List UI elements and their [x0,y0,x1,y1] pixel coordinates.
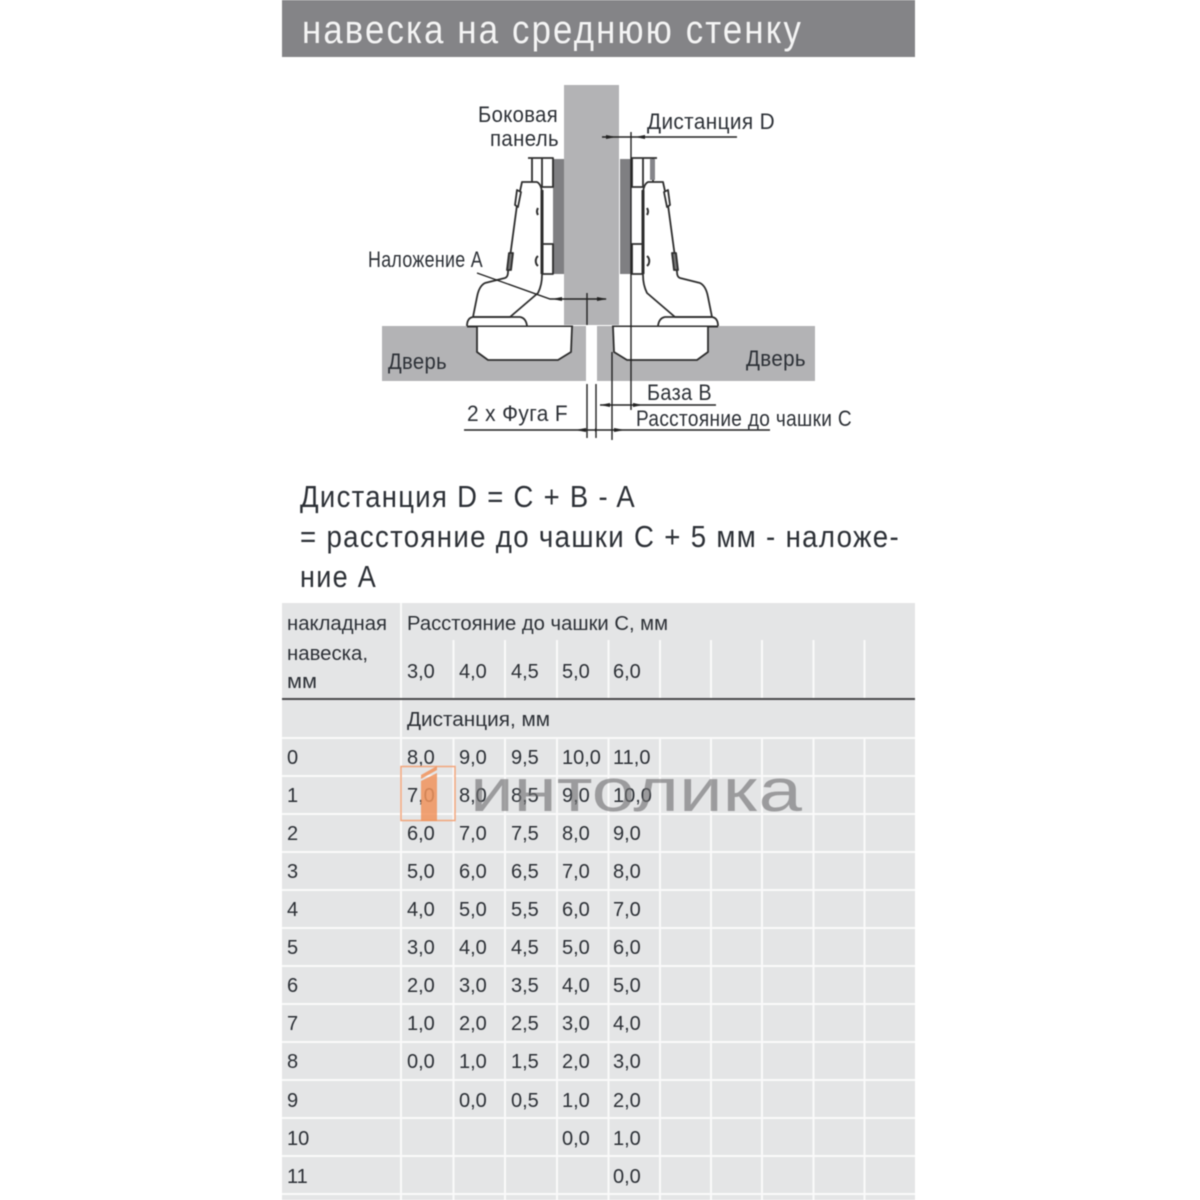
label: 2 x joint F: 2 x Фуга F [467,401,568,426]
table rows: 3,0 [407,937,435,959]
table rows: 6,0 [613,937,641,959]
label: side panel [478,102,559,151]
left mounting pad [553,159,564,274]
table rows: 1,0 [407,1013,435,1035]
table rows: 3,0 [613,1051,641,1073]
table rows: 0,5 [511,1090,539,1112]
dimension arrows [552,135,645,432]
table header: накладная [287,613,387,635]
right hinge accent [650,159,655,180]
table rows: 0,0 [562,1128,590,1150]
table rows: 8,0 [562,823,590,845]
table rows: 2 [287,823,298,845]
table header: мм [287,671,317,693]
table header: 5,0 [562,661,590,683]
right mounting pad [620,159,631,274]
table rows: 6,0 [562,899,590,921]
table rows [287,747,652,1188]
table rows: 4,0 [613,1013,641,1035]
right hinge [612,158,718,360]
table rows: 2,5 [511,1013,539,1035]
table rows: 9,0 [459,747,487,769]
table header: 3,0 [407,661,435,683]
table header: Расстояние до чашки С, мм [407,613,668,635]
table rows: 9 [287,1090,298,1112]
table rows: 8,0 [613,861,641,883]
table rows: 3 [287,861,298,883]
table rows: 5,0 [613,975,641,997]
header rule [282,698,915,700]
table rows: 9,5 [511,747,539,769]
table rows: 1,0 [613,1128,641,1150]
table rows: 4,0 [562,975,590,997]
table rows: 6,0 [459,861,487,883]
left door [382,326,586,381]
table rows: 0 [287,747,298,769]
table rows: 8,0 [407,747,435,769]
table rows: 11,0 [613,747,650,769]
table header: 4,0 [459,661,487,683]
side panel [564,85,619,325]
table rows: 2,0 [407,975,435,997]
table rows: 3,5 [511,975,539,997]
table rows: 7,0 [407,785,435,807]
table header: навеска, [287,643,368,665]
table rows: 4,5 [511,937,539,959]
table rows: 6 [287,975,298,997]
table rows: 6,5 [511,861,539,883]
table rows: 8,0 [459,785,487,807]
label: right door: Дверь [746,346,806,371]
table rows: 5 [287,937,298,959]
table rows: 1,0 [562,1090,590,1112]
table rows: 2,0 [562,1051,590,1073]
dimension lines [464,132,770,440]
formula text: = расстояние до чашки С + 5 мм - наложе- [300,519,900,554]
label: base B: База B [647,380,712,405]
table rows: 5,0 [407,861,435,883]
table header: 4,5 [511,661,539,683]
watermark logo [401,757,803,824]
distance table [282,603,915,1200]
table rows: 0,0 [613,1166,641,1188]
table background [282,603,915,1200]
logo icon [401,766,455,821]
table rows: 4,0 [407,899,435,921]
formula text: Дистанция D = C + B - A [300,479,636,514]
table rows: 1 [287,785,298,807]
table rows: 4,0 [459,937,487,959]
table rows: 2,0 [459,1013,487,1035]
label: left door: Дверь [388,349,447,374]
table header [287,613,668,731]
title banner: навеска на среднюю стенку [302,8,803,52]
table rows: 0,0 [407,1051,435,1073]
table rows: 5,0 [562,937,590,959]
logo wordmark: интолика [470,757,803,824]
table rows: 5,5 [511,899,539,921]
table rows: 2,0 [613,1090,641,1112]
hinge diagram [368,85,852,440]
label: cup distance C: Расстояние до чашки С [636,406,852,431]
table rows: 10,0 [613,785,652,807]
left hinge [467,158,573,360]
table rows: 9,0 [562,785,590,807]
table rows: 10,0 [562,747,601,769]
table grid [282,603,915,1200]
table rows: 11 [287,1166,308,1188]
formula text [300,479,900,594]
right door [597,326,815,381]
table rows: 7,0 [562,861,590,883]
table header: Дистанция, мм [407,709,550,731]
formula text: ние А [300,559,377,594]
table rows: 4 [287,899,298,921]
table rows: 1,0 [459,1051,487,1073]
table rows: 1,5 [511,1051,539,1073]
table rows: 9,0 [613,823,641,845]
table rows: 7,5 [511,823,539,845]
table rows: 7,0 [613,899,641,921]
table rows: 8 [287,1051,298,1073]
table rows: 0,0 [459,1090,487,1112]
table rows: 7 [287,1013,298,1035]
table rows: 3,0 [562,1013,590,1035]
table rows: 8,5 [511,785,539,807]
label: side panel: Боковая [478,102,558,127]
label: side panel: панель [490,126,559,151]
table rows: 3,0 [459,975,487,997]
label: distance D: Дистанция D [647,109,775,134]
table rows: 6,0 [407,823,435,845]
table rows: 5,0 [459,899,487,921]
table rows: 10 [287,1128,309,1150]
label: overlay A: Наложение А [368,247,483,272]
table rows: 7,0 [459,823,487,845]
table header: 6,0 [613,661,641,683]
